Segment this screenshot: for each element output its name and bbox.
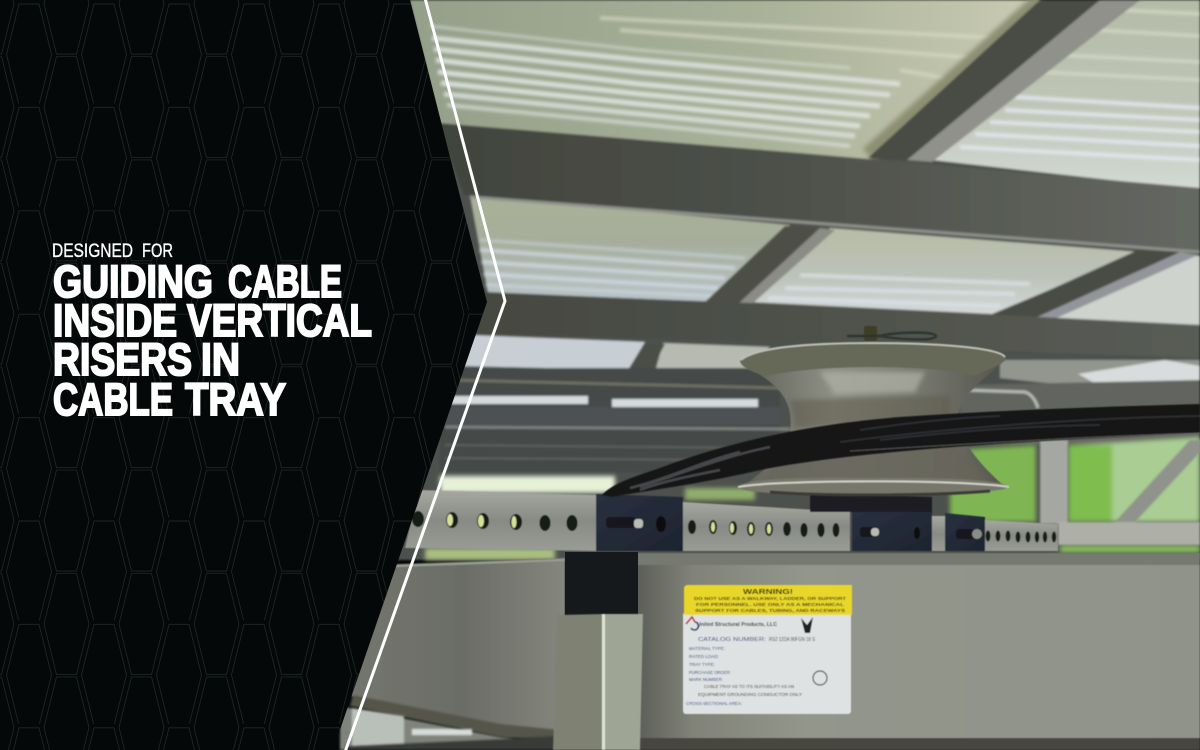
tray lower lip xyxy=(350,695,560,742)
support post: black upper xyxy=(565,552,638,615)
rail holes xyxy=(412,511,1056,542)
strut rails and brackets xyxy=(405,490,1058,551)
spool top flange xyxy=(740,342,1006,376)
label: white data area: RATED LOAD: xyxy=(689,654,719,659)
label: yellow warning band: WARNING! xyxy=(743,587,793,596)
photo: pulley on cable tray under a roof xyxy=(340,0,1200,750)
warning label xyxy=(683,585,852,714)
rail small segment xyxy=(932,516,945,551)
right cable tray side xyxy=(636,553,1200,750)
second cross beam xyxy=(465,292,1200,358)
rail segment right xyxy=(984,520,1058,551)
right side beam behind pulley xyxy=(960,380,1200,445)
hole highlights xyxy=(447,514,771,534)
label: white data area: MATERIAL TYPE: xyxy=(689,646,725,651)
label: white data area: TRAY TYPE: xyxy=(689,662,715,667)
spool bottom flange xyxy=(738,478,1009,495)
structure: post and strut right xyxy=(1040,440,1200,545)
background: overhead roof and beams xyxy=(340,0,1200,560)
lower beams band xyxy=(440,368,790,472)
floor area under tray xyxy=(340,706,560,750)
label: white data area: CROSS-SECTIONAL AREA: xyxy=(686,701,742,706)
icon: certification seal xyxy=(813,671,827,685)
eyebrow: designed for: DESIGNED xyxy=(52,240,133,262)
heading: guiding cable inside vertical risers in cable tray: TRAY xyxy=(185,374,286,425)
rail segment centre xyxy=(683,502,850,551)
diagonal purlins: middle xyxy=(705,226,1198,320)
pulley spool xyxy=(738,326,1009,495)
left cable tray side xyxy=(340,558,565,735)
bracket left xyxy=(596,494,683,551)
icon: maker logo xyxy=(686,617,698,630)
heading: guiding cable inside vertical risers in cable tray: CABLE xyxy=(53,374,173,425)
label: white data area: CABLE TRAY AS TO ITS SUITABILITY AS AN xyxy=(704,684,794,689)
heading: guiding cable inside vertical risers in cable tray: CABLE xyxy=(228,256,342,307)
black chevron panel xyxy=(0,0,487,750)
roof panel: top centre xyxy=(410,0,1045,160)
label: white data area: PURCHASE ORDER: xyxy=(689,670,731,675)
text block: headline xyxy=(52,240,372,425)
white chevron outline xyxy=(345,0,505,750)
heading: guiding cable inside vertical risers in cable tray: IN xyxy=(201,334,240,385)
bracket right xyxy=(945,513,985,551)
eyebrow: designed for: FOR xyxy=(142,240,173,262)
icon: us tray eagle mark xyxy=(801,617,813,633)
twisted black cable xyxy=(602,404,1200,497)
label: yellow warning band: FOR PERSONNEL. USE ONLY AS A MECHANICAL xyxy=(696,602,844,607)
diagonal roof purlin: top right xyxy=(868,0,1140,162)
rail segment left xyxy=(405,490,596,551)
bracket centre xyxy=(810,493,932,551)
background: green foliage and structure xyxy=(425,437,1200,560)
heading: guiding cable inside vertical risers in cable tray: VERTICAL xyxy=(187,295,372,346)
heading: guiding cable inside vertical risers in cable tray: RISERS xyxy=(53,334,192,385)
roof panel: middle right xyxy=(748,228,1140,314)
main cross beam xyxy=(438,123,1200,252)
label: white data area: EQUIPMENT GROUNDING CONDUCTOR ONLY xyxy=(698,692,802,697)
label: yellow warning band: DO NOT USE AS A WALKWAY, LADDER, OR SUPPORT xyxy=(694,596,846,601)
spool body shading xyxy=(760,372,990,482)
label: white data area: MARK NUMBER: xyxy=(689,677,723,682)
label: white data area: RS2 12DA 90FGN 18 S xyxy=(769,637,816,643)
hexagon line pattern xyxy=(0,0,487,750)
roof panel: lower xyxy=(462,335,1200,386)
spool body xyxy=(742,360,1004,485)
roof panel: top right xyxy=(932,0,1200,190)
heading: guiding cable inside vertical risers in cable tray: GUIDING xyxy=(53,256,213,307)
label: yellow warning band xyxy=(684,585,852,615)
support post: galvanized lower xyxy=(553,614,643,750)
cotter pin xyxy=(847,326,936,341)
heading: guiding cable inside vertical risers in cable tray xyxy=(53,256,372,425)
label: white data area xyxy=(683,612,851,714)
roof panel: middle left xyxy=(470,195,790,302)
heading: guiding cable inside vertical risers in cable tray: INSIDE xyxy=(53,295,177,346)
roof panel: far right xyxy=(1050,256,1200,325)
label: white data area: CATALOG NUMBER: xyxy=(698,637,766,643)
label: yellow warning band: SUPPORT FOR CABLES, TUBING, AND RACEWAYS xyxy=(695,608,845,613)
label: white data area: United Structural Products, LLC xyxy=(697,622,777,628)
